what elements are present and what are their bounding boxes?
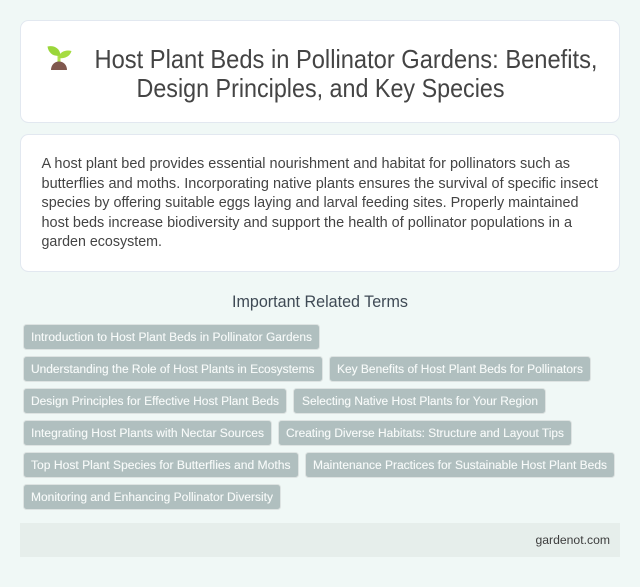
- icon: seedling: [48, 46, 72, 70]
- tag: Top Host Plant Species for Butterflies and Moths: [31, 458, 290, 472]
- tag: Introduction to Host Plant Beds in Pollinator Gardens: [31, 330, 312, 344]
- tag: [306, 452, 614, 478]
- related terms tags: [24, 324, 614, 510]
- description text: butterflies and moths. Incorporating native plants ensures the survival of specific insect: [42, 176, 598, 192]
- title: [94, 46, 598, 103]
- tag: Selecting Native Host Plants for Your Region: [302, 394, 538, 408]
- tag: [24, 420, 272, 446]
- description text: species by offering suitable eggs laying and larval feeding sites. Properly maintained: [42, 195, 578, 211]
- tag: [24, 452, 298, 478]
- tag: Monitoring and Enhancing Pollinator Diversity: [31, 490, 274, 504]
- description text: [42, 156, 598, 250]
- panel: description: [20, 134, 620, 272]
- tag: [24, 484, 280, 510]
- tag: Key Benefits of Host Plant Beds for Pollinators: [337, 362, 583, 376]
- tag: [294, 388, 546, 414]
- description text: host beds increase biodiversity and support the health of pollinator populations in a: [42, 215, 573, 231]
- footer: [20, 523, 620, 557]
- heading: important related terms: Important Related Terms: [232, 293, 408, 311]
- description text: garden ecosystem.: [42, 234, 162, 250]
- header panel: [20, 20, 620, 122]
- tag: Maintenance Practices for Sustainable Host Plant Beds: [313, 458, 607, 472]
- tag: Creating Diverse Habitats: Structure and Layout Tips: [286, 426, 564, 440]
- tag: [24, 356, 322, 382]
- tag: [24, 388, 286, 414]
- tag: Integrating Host Plants with Nectar Sources: [31, 426, 264, 440]
- description text: A host plant bed provides essential nourishment and habitat for pollinators such as: [42, 156, 570, 172]
- tag: [330, 356, 590, 382]
- tag: [278, 420, 572, 446]
- title: Design Principles, and Key Species: [136, 75, 504, 103]
- tag: [24, 324, 320, 350]
- tag: Understanding the Role of Host Plants in Ecosystems: [31, 362, 314, 376]
- footer source text: gardenot.com: [536, 533, 610, 547]
- tag: Design Principles for Effective Host Plant Beds: [31, 394, 279, 408]
- title: Host Plant Beds in Pollinator Gardens: Benefits,: [94, 46, 598, 74]
